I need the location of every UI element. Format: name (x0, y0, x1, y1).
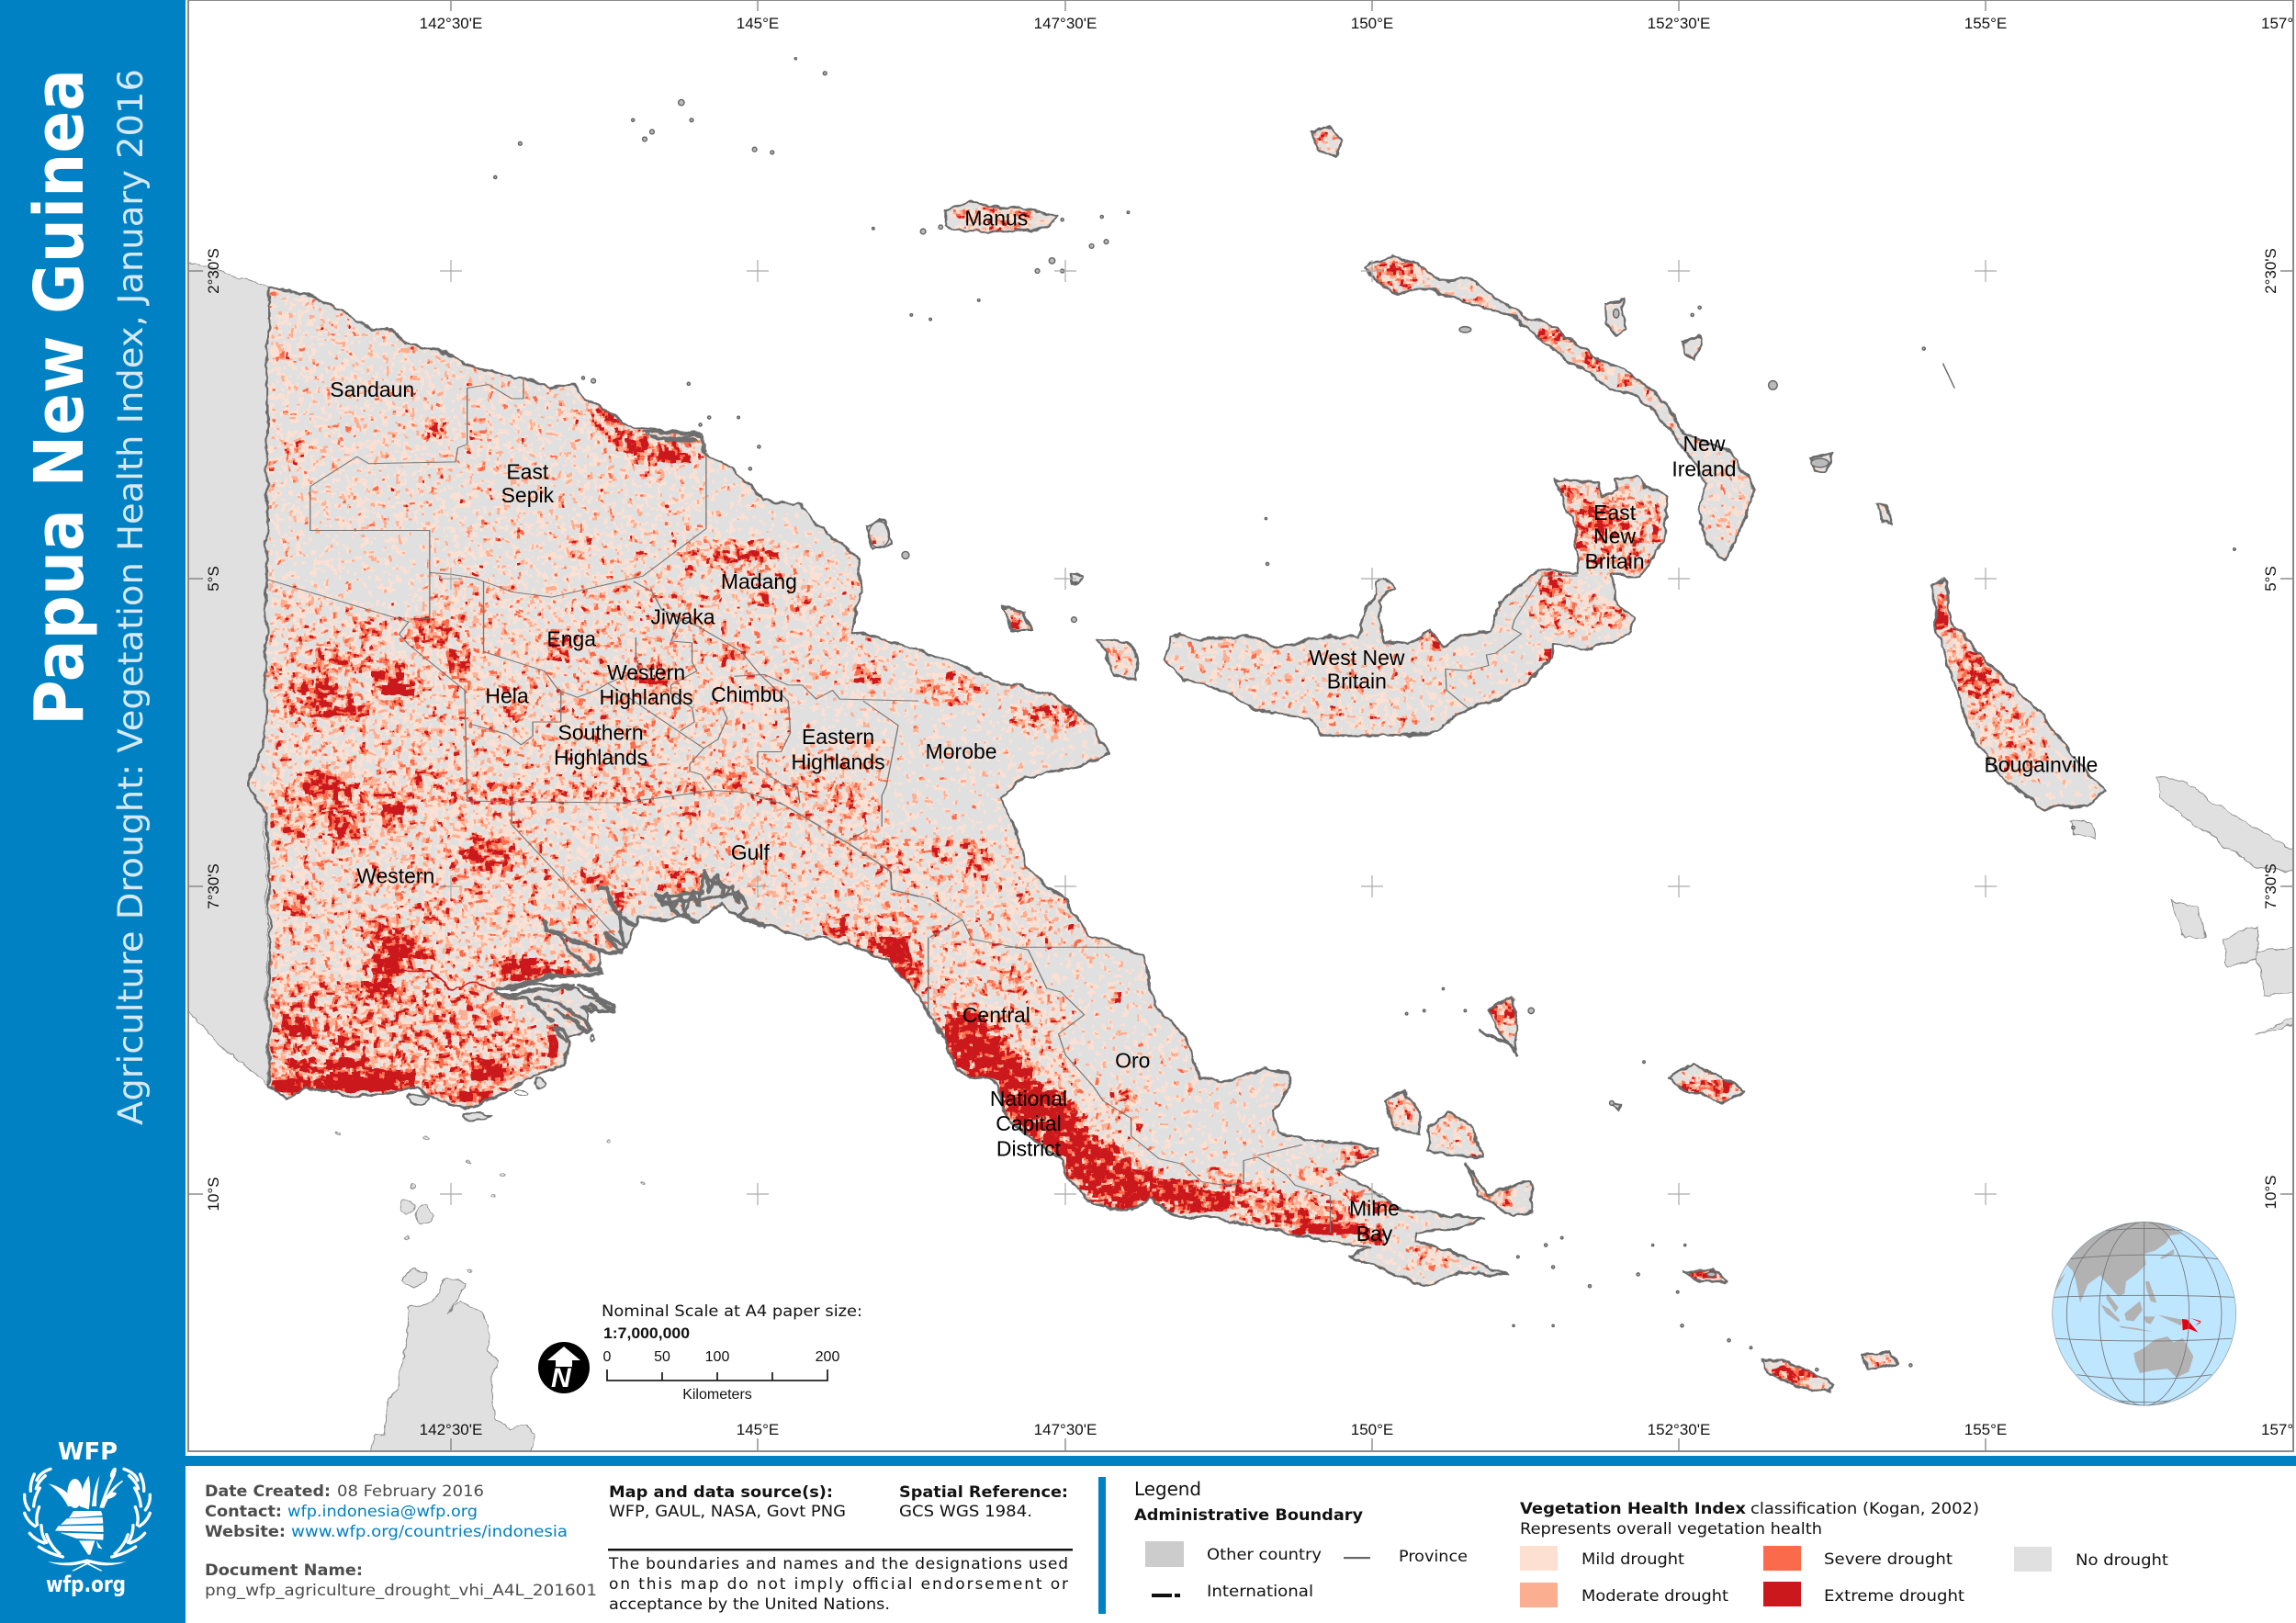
province labels: Eastern (802, 725, 874, 749)
WFP wordmark: WFP (58, 1438, 118, 1466)
footer: document metadata: Website: (205, 1523, 286, 1541)
footer: document metadata: wfp.indonesia@wfp.org (287, 1503, 478, 1521)
province labels: Highlands (792, 750, 885, 773)
legend: vegetation health index classes: No drought (2076, 1551, 2168, 1570)
scale bar: 0 (603, 1349, 612, 1365)
province labels: District (996, 1136, 1062, 1160)
province labels: Western (607, 660, 685, 684)
icon: WFP emblem (25, 1467, 126, 1572)
province labels: Sepik (501, 483, 555, 507)
province labels: West New (1309, 646, 1405, 670)
province labels: Hela (485, 684, 529, 708)
scale bar: Kilometers (682, 1387, 752, 1403)
footer: disclaimer: on this map do not imply official endorsement or (609, 1575, 1068, 1594)
legend: administrative boundary: International (1207, 1583, 1313, 1601)
province labels: National (990, 1087, 1067, 1110)
WFP website wordmark: wfp.org (46, 1572, 126, 1597)
province labels: Western (356, 864, 434, 888)
province labels: Oro (1115, 1049, 1150, 1073)
scale statement (602, 1302, 862, 1342)
province labels: Highlands (600, 685, 693, 709)
province labels: Britain (1327, 670, 1387, 693)
graticule crosses (440, 260, 1997, 1205)
province labels: Gulf (731, 840, 771, 864)
scale statement: Nominal Scale at A4 paper size: (602, 1302, 862, 1320)
footer: document metadata: Document Name: (205, 1561, 363, 1580)
footer: disclaimer: The boundaries and names and the designations used (608, 1555, 1068, 1573)
province labels: New (1593, 524, 1637, 548)
Cape York and Torres Strait islands (370, 1268, 535, 1450)
province labels: East (1593, 501, 1637, 524)
offshore islands near the south coast (408, 1078, 546, 1121)
footer: sources: Map and data source(s): (609, 1483, 833, 1502)
footer: disclaimer: acceptance by the United Nations. (609, 1595, 890, 1614)
footer: spatial reference (899, 1483, 1068, 1521)
footer blue vertical divider (1098, 1477, 1106, 1614)
legend: vegetation health index classes: classification (Kogan, 2002) (1750, 1500, 1979, 1518)
small outlying islands (494, 58, 2235, 1371)
footer: document metadata: 08 February 2016 (337, 1482, 484, 1501)
province labels: Bay (1356, 1222, 1393, 1245)
legend: vegetation health index classes: Severe drought (1824, 1550, 1953, 1569)
province labels: Jiwaka (650, 604, 715, 628)
longitude labels top: 147°30'E (1034, 15, 1097, 32)
Fly River course (404, 970, 495, 991)
legend title: Legend (1134, 1478, 1201, 1500)
longitude labels bottom: 145°E (737, 1421, 779, 1438)
longitude labels top: 155°E (1964, 15, 2007, 32)
scale bar: 100 (705, 1349, 729, 1365)
latitude labels left: 7°30'S (205, 863, 222, 909)
province labels: Bougainville (1984, 752, 2098, 776)
scale statement: 1:7,000,000 (603, 1324, 690, 1342)
footer blue divider bar (186, 1456, 2296, 1466)
coastline (248, 126, 2104, 1392)
footer: document metadata: www.wfp.org/countries/indonesia (291, 1523, 568, 1541)
legend: vegetation health index classes: Mild drought (1581, 1550, 1684, 1569)
latitude labels right: 10°S (2262, 1175, 2279, 1210)
latitude labels left (205, 248, 222, 1212)
province labels: Central (962, 1003, 1030, 1027)
latitude labels left: 5°S (205, 566, 222, 592)
Fly and Gulf river deltas (494, 870, 765, 1043)
province labels: Ireland (1671, 456, 1737, 480)
province labels: Southern (558, 720, 644, 744)
province labels: Capital (996, 1111, 1062, 1135)
province labels: Madang (721, 569, 797, 593)
landmasses with drought raster (189, 125, 2292, 1450)
longitude labels top: 150°E (1351, 15, 1393, 32)
province boundaries (268, 379, 1578, 1233)
footer: document metadata: Contact: (205, 1503, 282, 1521)
scale bar: 200 (816, 1349, 839, 1365)
latitude labels left: 2°30'S (205, 248, 222, 294)
legend: administrative boundary: Other country (1207, 1546, 1322, 1564)
legend: vegetation health index classes: Extreme drought (1824, 1587, 1964, 1606)
longitude labels bottom: 155°E (1964, 1421, 2007, 1438)
drought raster: vegetation health index classes (250, 129, 2099, 1390)
footer: document metadata: png_wfp_agriculture_drought_vhi_A4L_201601 (205, 1582, 597, 1600)
longitude labels bottom (420, 1421, 2296, 1438)
icon: north arrow: N (551, 1363, 572, 1393)
latitude labels right: 2°30'S (2262, 248, 2279, 294)
latitude labels right (2262, 248, 2279, 1210)
footer: document metadata: Date Created: (205, 1482, 331, 1501)
province labels: Highlands (554, 745, 647, 769)
province labels: Morobe (926, 739, 997, 763)
legend: administrative boundary: Province (1399, 1548, 1468, 1566)
panel: left blue title band (0, 0, 186, 1623)
legend: administrative boundary: Administrative Boundary (1134, 1506, 1363, 1525)
Sepik river mouth marshes (646, 432, 706, 451)
province labels: Milne (1349, 1197, 1400, 1221)
legend: administrative boundary (1134, 1506, 1468, 1601)
legend: vegetation health index classes: Vegetation Health Index (1520, 1500, 1746, 1518)
longitude labels top (420, 15, 2296, 32)
province labels: Enga (546, 626, 596, 650)
longitude labels top: 142°30'E (420, 15, 482, 32)
locator globe (2048, 1219, 2236, 1405)
longitude labels top: 152°30'E (1648, 15, 1710, 32)
footer: spatial reference: Spatial Reference: (899, 1483, 1068, 1502)
footer: document metadata (205, 1482, 597, 1600)
province labels: New (1683, 432, 1726, 456)
scale bar (603, 1349, 839, 1403)
province labels: Sandaun (330, 378, 414, 401)
legend (1134, 1478, 2168, 1607)
province labels: Manus (964, 207, 1028, 231)
other countries (175, 258, 2296, 1086)
longitude labels bottom: 152°30'E (1648, 1421, 1710, 1438)
title: Papua New Guinea (20, 69, 99, 726)
footer: sources (609, 1483, 846, 1521)
legend: vegetation health index classes: Represents overall vegetation health (1520, 1520, 1822, 1538)
province labels: East (506, 460, 549, 483)
longitude labels bottom: 150°E (1351, 1421, 1393, 1438)
footer: disclaimer (608, 1549, 1073, 1614)
subtitle: Agriculture Drought: Vegetation Health Index, January 2016 (111, 69, 151, 1125)
longitude labels bottom: 142°30'E (420, 1421, 482, 1438)
province labels: Britain (1585, 549, 1645, 573)
legend: vegetation health index classes (1520, 1500, 2168, 1607)
province labels (330, 207, 2098, 1245)
province labels: Chimbu (711, 682, 783, 706)
legend: vegetation health index classes: Moderate drought (1581, 1587, 1728, 1606)
footer: sources: WFP, GAUL, NASA, Govt PNG (609, 1503, 846, 1521)
footer: spatial reference: GCS WGS 1984. (899, 1503, 1032, 1521)
icon: north arrow (538, 1342, 590, 1393)
longitude labels bottom: 147°30'E (1034, 1421, 1097, 1438)
land base: Papua New Guinea (248, 126, 2104, 1392)
scale bar: 50 (654, 1349, 670, 1365)
latitude labels right: 7°30'S (2262, 863, 2279, 909)
latitude labels right: 5°S (2262, 566, 2279, 592)
latitude labels left: 10°S (205, 1177, 222, 1212)
longitude labels top: 145°E (737, 15, 779, 32)
